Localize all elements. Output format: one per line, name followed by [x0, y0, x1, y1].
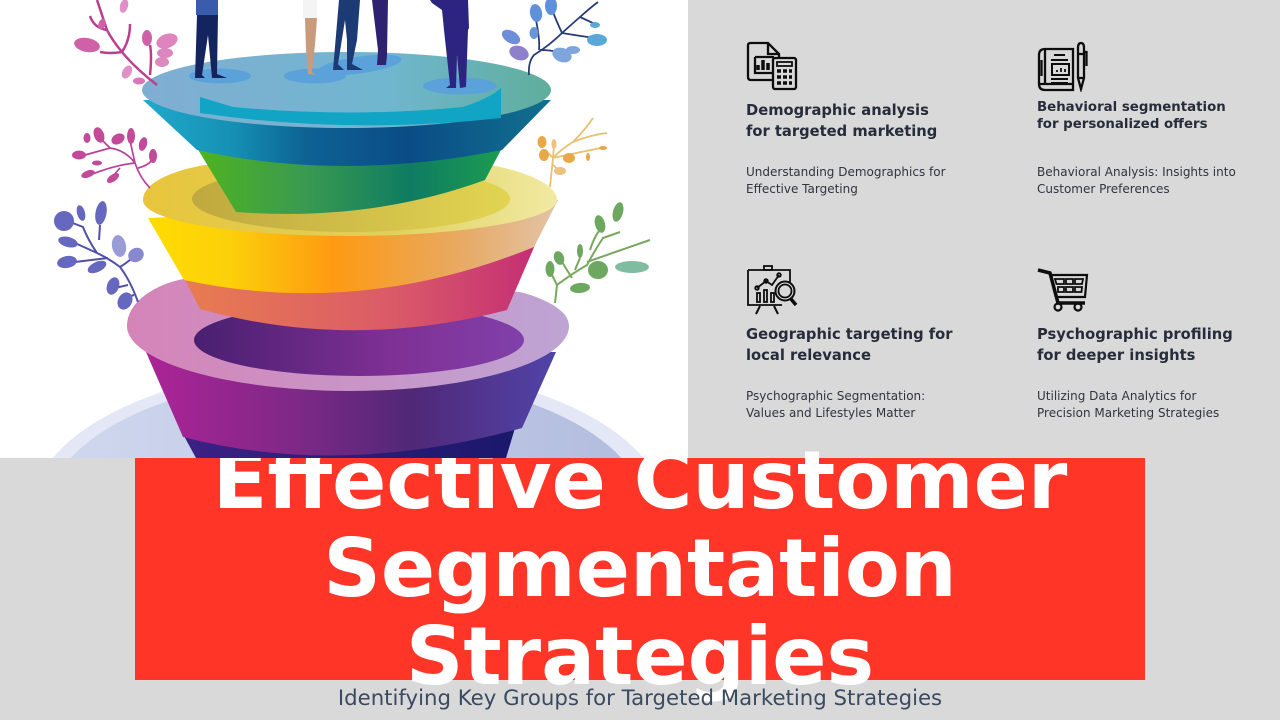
- heading: [746, 102, 937, 140]
- description: Understanding Demographics for: [746, 165, 946, 179]
- bottom tier: purple: [127, 278, 569, 458]
- people standing on the funnel: [189, 0, 497, 94]
- title: [213, 434, 1068, 703]
- heading: for personalized offers: [1037, 117, 1208, 132]
- description: [1037, 165, 1236, 196]
- description: Customer Preferences: [1037, 182, 1170, 196]
- plant: gold middle right: [538, 118, 607, 187]
- illustration: segmentation funnel: [0, 0, 688, 458]
- title: Strategies: [406, 610, 874, 703]
- heading: [1037, 326, 1233, 364]
- icon: chart board with magnifier: [747, 265, 798, 314]
- heading: [1037, 100, 1226, 132]
- icon: document and calculator: [746, 42, 798, 90]
- card: psychographic profiling: [1037, 268, 1233, 420]
- card: demographic analysis: [746, 42, 946, 196]
- heading: Demographic analysis: [746, 102, 929, 119]
- card: geographic targeting: [746, 265, 953, 420]
- plant: pink top left: [73, 0, 180, 85]
- plant: green right: [546, 201, 650, 303]
- heading: Behavioral segmentation: [1037, 100, 1226, 115]
- plant: magenta middle left: [72, 126, 157, 188]
- heading: local relevance: [746, 347, 871, 364]
- card: behavioral segmentation: [1037, 42, 1236, 196]
- description: Behavioral Analysis: Insights into: [1037, 165, 1236, 179]
- middle tier: yellow and orange: [143, 165, 558, 330]
- heading: Psychographic profiling: [1037, 326, 1233, 343]
- description: Effective Targeting: [746, 182, 858, 196]
- plant: blue top right: [499, 0, 607, 75]
- description: [1037, 389, 1219, 420]
- title: Effective Customer: [213, 434, 1067, 527]
- heading: for deeper insights: [1037, 347, 1195, 364]
- description: [746, 389, 925, 420]
- subtitle: Identifying Key Groups for Targeted Marketing Strategies: [338, 686, 942, 711]
- plant: blue left: [54, 200, 146, 312]
- title banner: [135, 458, 1145, 680]
- description: Values and Lifestyles Matter: [746, 406, 915, 420]
- icon: report book and pen: [1038, 42, 1088, 92]
- description: Psychographic Segmentation:: [746, 389, 925, 403]
- base plate: [32, 364, 664, 656]
- description: Utilizing Data Analytics for: [1037, 389, 1196, 403]
- description: [746, 165, 946, 196]
- icon: shopping cart: [1038, 268, 1088, 312]
- heading: [746, 326, 953, 364]
- heading: Geographic targeting for: [746, 326, 953, 343]
- title: Segmentation: [323, 522, 957, 615]
- description: Precision Marketing Strategies: [1037, 406, 1219, 420]
- top tier: teal and green: [142, 52, 551, 214]
- heading: for targeted marketing: [746, 123, 937, 140]
